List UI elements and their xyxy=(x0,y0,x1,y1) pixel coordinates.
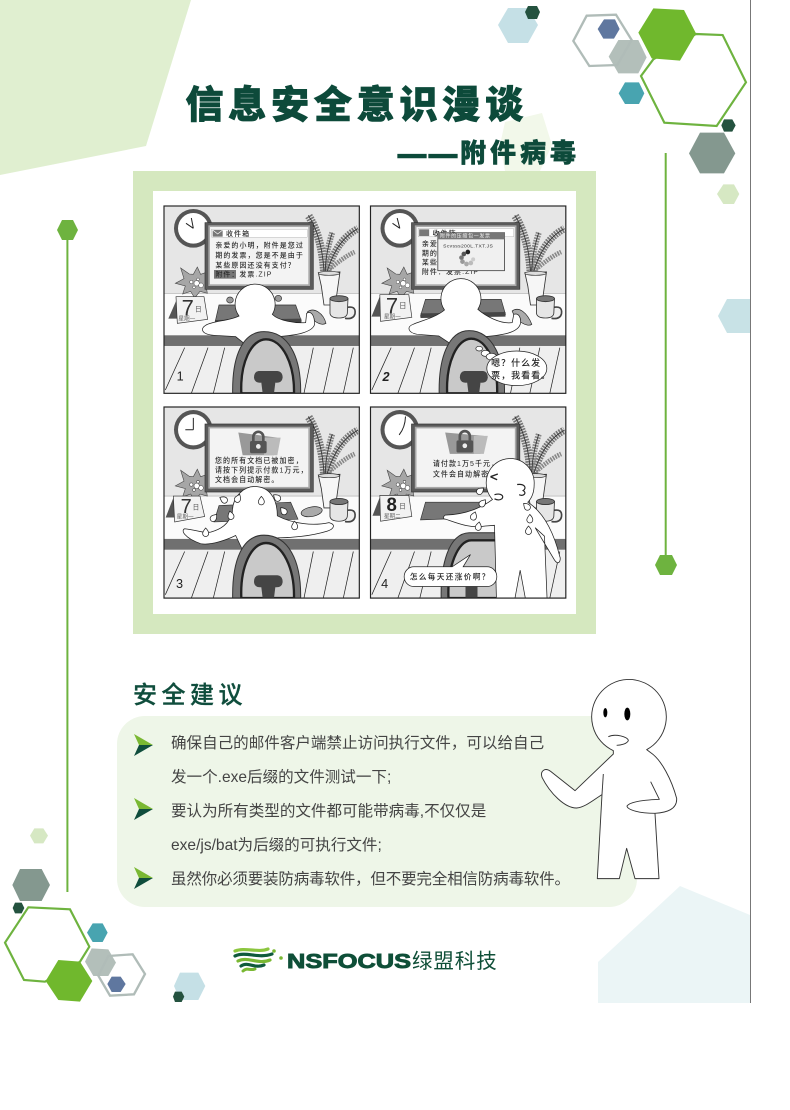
thought bubble: 嗯？什么发 xyxy=(491,357,541,368)
logo: NSFOCUS: NSFOCUS xyxy=(287,951,411,973)
email text: 附件： xyxy=(215,270,239,279)
comic panel 2 xyxy=(370,206,566,393)
logo: NSFOCUS: 绿盟科技 xyxy=(412,950,498,973)
extraction dialog xyxy=(438,233,504,271)
crying person xyxy=(443,458,560,601)
title: 信息安全意识漫谈 xyxy=(186,84,528,127)
keyboard xyxy=(215,305,301,325)
email text: 发票.ZIP xyxy=(239,270,273,279)
advice text 1: 确保自己的邮件客户端禁止访问执行文件，可以给自己 xyxy=(171,734,544,752)
keyboard xyxy=(214,502,298,522)
advice text 2: exe/js/bat为后缀的可执行文件; xyxy=(171,836,382,854)
chair xyxy=(441,533,500,598)
advice text 3: 虽然你必须要装防病毒软件，但不要完全相信防病毒软件。 xyxy=(171,870,570,888)
chair xyxy=(439,331,505,393)
icon: arrow bullet 3 xyxy=(134,867,153,889)
ransom message: 文档会自动解密。 xyxy=(215,475,279,484)
ransom message: 请付款1万5千元， xyxy=(433,459,499,468)
background: lower-right pale blue shape xyxy=(598,886,750,1003)
locked folder icon xyxy=(445,431,488,454)
email text: 期的发票，您是不是由于 xyxy=(215,251,304,260)
mouse xyxy=(307,310,326,324)
comic panel 1 xyxy=(164,206,359,393)
calendar: 日 xyxy=(399,502,406,510)
locked folder icon xyxy=(238,432,281,455)
thought bubble xyxy=(476,346,551,386)
thought bubble: 票，我看看。 xyxy=(491,370,551,381)
calendar xyxy=(372,494,412,521)
person slumped xyxy=(182,486,334,548)
extraction dialog: 附件的压缩包一发票 xyxy=(440,233,491,240)
ransom message: 您的所有文档已被加密， xyxy=(215,456,304,465)
email window behind: 某些 xyxy=(422,258,438,267)
hexagons top centre xyxy=(498,6,540,43)
hexagon cluster top right xyxy=(573,8,746,204)
email window behind: 附件：发票.ZIP xyxy=(422,267,479,276)
icon: logo flag xyxy=(235,949,283,971)
ransom message: 请按下列提示付款1万元， xyxy=(215,466,309,475)
email window behind: 期的 xyxy=(422,248,438,257)
email window behind xyxy=(418,228,514,276)
calendar: 星期二 xyxy=(384,513,401,520)
background: top-left pale green shape xyxy=(0,0,191,175)
extraction dialog: Scvsss200L.TXT.JS xyxy=(443,243,493,249)
hexagon right side pale blue xyxy=(718,299,750,333)
person xyxy=(408,278,521,343)
calendar: 8 xyxy=(386,494,397,515)
mouse xyxy=(512,309,532,325)
panel number: 3 xyxy=(176,576,183,591)
calendar xyxy=(371,293,412,321)
calendar: 星期一 xyxy=(178,316,196,323)
panel number: 4 xyxy=(381,576,388,591)
panel number: 2 xyxy=(381,370,390,384)
calendar xyxy=(166,496,205,522)
icon: arrow bullet 1 xyxy=(134,734,153,756)
email window behind: 收件箱 xyxy=(432,228,457,237)
comic panel 3 xyxy=(164,407,359,598)
icon: arrow bullet 2 xyxy=(134,798,153,820)
person xyxy=(202,284,315,343)
keyboard xyxy=(420,502,485,520)
calendar: 日 xyxy=(399,301,406,310)
hexagon cluster bottom left xyxy=(5,828,205,1002)
email text: 亲爱的小明，附件是您过 xyxy=(215,241,304,250)
calendar: 日 xyxy=(193,504,199,512)
speech bubble: 怎么每天还涨价啊？ xyxy=(410,571,491,581)
comic frame xyxy=(133,171,596,634)
calendar: 日 xyxy=(195,305,202,313)
subtitle: — xyxy=(429,138,457,171)
sweat drops xyxy=(203,492,298,537)
keyboard xyxy=(420,299,505,318)
ransom message: 文件会自动解密 xyxy=(433,469,489,478)
calendar: 星期一 xyxy=(177,513,194,521)
calendar: 7 xyxy=(182,295,194,320)
ransom message xyxy=(433,460,494,478)
advice text 2: 要认为所有类型的文件都可能带病毒,不仅仅是 xyxy=(171,802,486,820)
speech bubble xyxy=(404,555,497,587)
advice text 2 xyxy=(171,802,486,854)
calendar: 7 xyxy=(181,496,192,518)
email text: 某些原因还没有支付？ xyxy=(215,261,296,270)
page edge line xyxy=(750,0,752,1003)
illustration: pointing figure xyxy=(542,679,677,879)
left vertical green line with node xyxy=(57,220,78,892)
email window behind: 亲爱 xyxy=(422,239,438,248)
email window header xyxy=(212,229,307,238)
logo: NSFOCUS xyxy=(235,949,498,973)
email text xyxy=(214,241,304,279)
calendar: 星期一 xyxy=(384,314,401,321)
panel number: 1 xyxy=(177,370,184,384)
background: faint hexagon behind title xyxy=(500,113,552,171)
comic panel 4 xyxy=(370,407,566,601)
right vertical green line with node xyxy=(655,153,677,575)
calendar xyxy=(168,295,208,323)
subtitle: 附件病毒 xyxy=(460,138,580,168)
panel: advice xyxy=(117,716,637,907)
heading: safety advice: 安全建议 xyxy=(133,682,247,709)
advice text 1 xyxy=(171,734,544,786)
email window header: 收件箱 xyxy=(226,229,250,238)
mouse xyxy=(300,506,322,518)
subtitle xyxy=(398,138,580,171)
ransom message xyxy=(215,456,309,484)
subtitle: — xyxy=(398,138,426,171)
advice text 1: 发一个.exe后缀的文件测试一下; xyxy=(171,768,391,786)
calendar: 7 xyxy=(386,293,398,318)
